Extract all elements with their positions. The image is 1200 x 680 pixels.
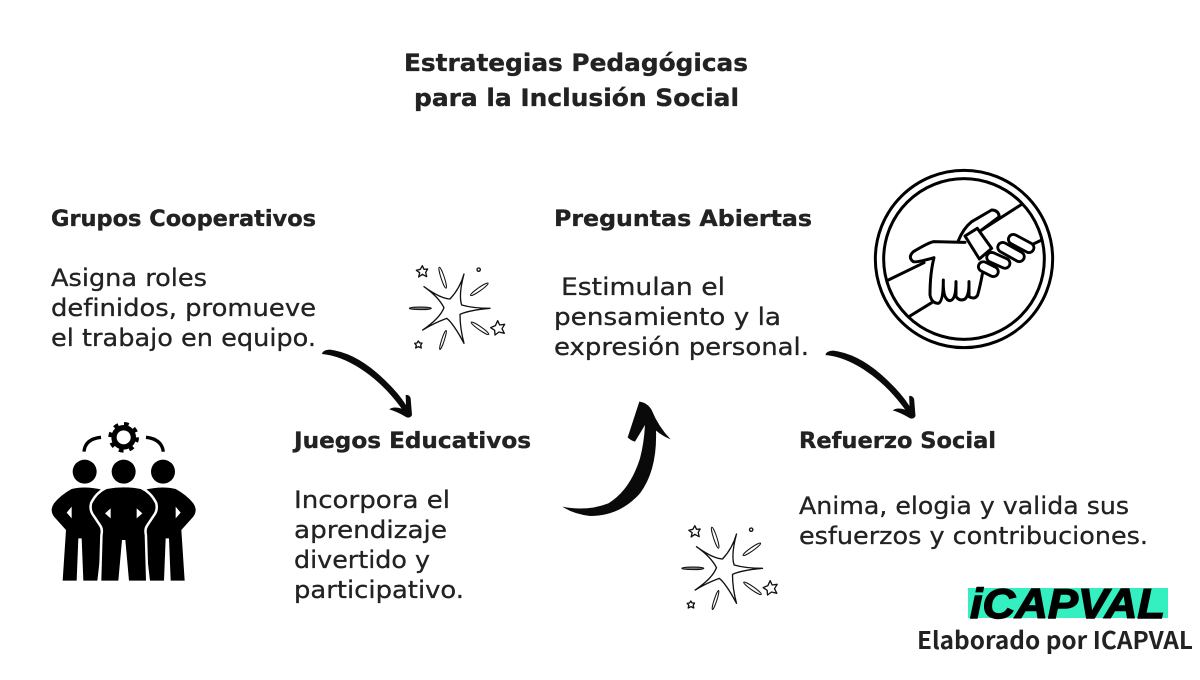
text block: juegos educativos: participativo. — [294, 576, 464, 604]
text block: grupos cooperativos: Asigna roles — [51, 264, 207, 292]
icon: sparkle bottom — [682, 526, 777, 610]
heading: preguntas abiertas: Preguntas Abiertas — [554, 207, 812, 232]
text block: refuerzo social: esfuerzos y contribuciones. — [799, 522, 1148, 550]
title: Estrategias Pedagógicas — [404, 49, 748, 77]
heading: juegos educativos: Juegos Educativos — [292, 429, 531, 454]
text block: preguntas abiertas — [554, 273, 809, 361]
heading: grupos cooperativos: Grupos Cooperativos — [51, 207, 316, 232]
text block: grupos cooperativos: el trabajo en equipo. — [51, 324, 316, 352]
title — [404, 49, 748, 112]
text block: juegos educativos: Incorpora el — [294, 486, 450, 514]
icon: team with gear — [52, 424, 196, 581]
text block: grupos cooperativos — [51, 264, 316, 352]
text block: preguntas abiertas: Estimulan el — [561, 273, 725, 301]
text block: grupos cooperativos: definidos, promueve — [51, 294, 316, 322]
icon: sparkle top — [409, 266, 505, 350]
panel: grupos cooperativos — [51, 207, 316, 352]
panel: juegos educativos — [292, 429, 531, 604]
arrow: juegos to preguntas — [562, 402, 671, 516]
text block: refuerzo social — [799, 492, 1148, 550]
arrow: preguntas to refuerzo — [825, 351, 915, 419]
text block: preguntas abiertas: pensamiento y la — [554, 303, 781, 331]
icon: handshake in circle — [875, 170, 1053, 348]
text block: juegos educativos: divertido y — [294, 546, 430, 574]
arrow: grupos to juegos — [322, 350, 412, 418]
panel: refuerzo social — [799, 429, 1148, 550]
text block: juegos educativos — [294, 486, 464, 604]
title: para la Inclusión Social — [414, 84, 739, 112]
text block: juegos educativos: aprendizaje — [294, 516, 447, 544]
panel: preguntas abiertas — [554, 207, 812, 361]
heading: refuerzo social: Refuerzo Social — [799, 429, 996, 454]
logo: iCAPVAL: iCAPVAL — [970, 580, 1165, 627]
credit text: Elaborado por ICAPVAL — [917, 621, 1193, 656]
text block: refuerzo social: Anima, elogia y valida sus — [799, 492, 1129, 520]
text block: preguntas abiertas: expresión personal. — [554, 333, 809, 361]
